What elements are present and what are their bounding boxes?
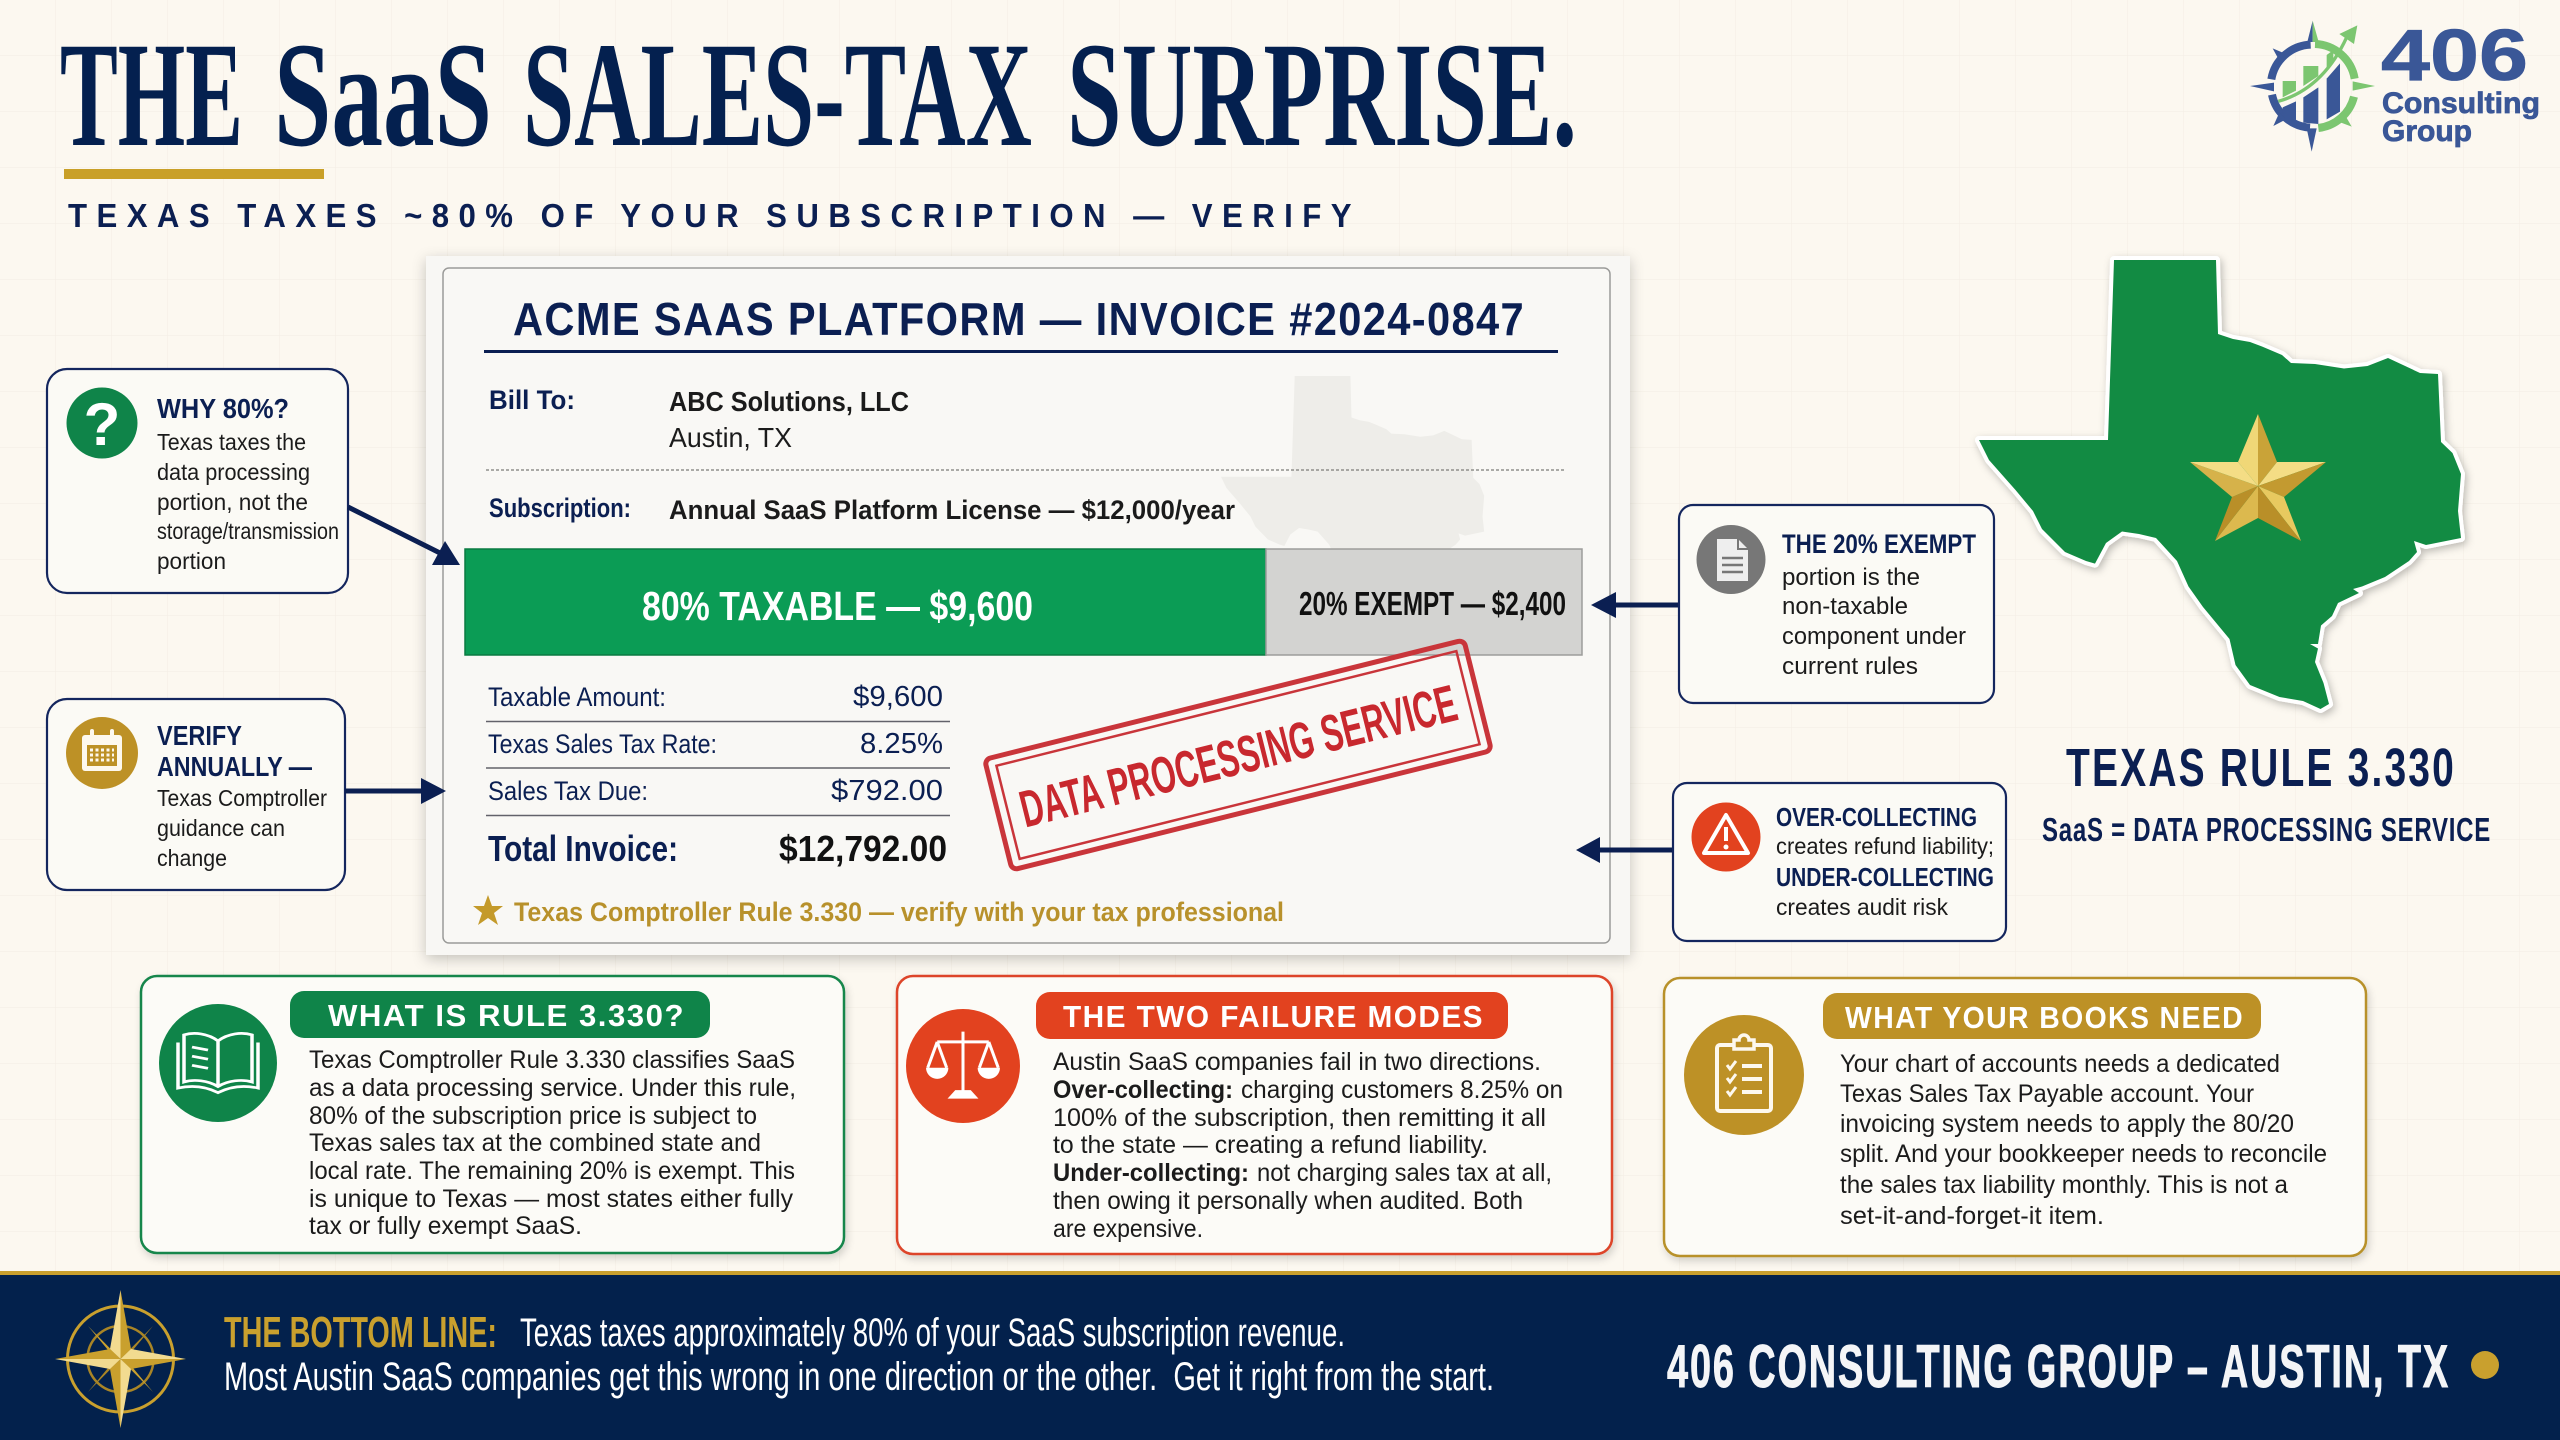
icon: warning triangle (1692, 802, 1760, 872)
split bar: 20 percent exempt: 20% EXEMPT — $2,400 (1299, 585, 1566, 622)
title: SaaS (274, 12, 492, 178)
title: SURPRISE. (1067, 12, 1577, 178)
callout text (1776, 802, 1994, 920)
subscription: Subscription: (489, 493, 631, 523)
calculation table: Sales Tax Due: (488, 776, 648, 806)
callout text: portion (157, 548, 226, 574)
subscription (489, 493, 1235, 525)
body text: split. And your bookkeeper needs to reconcile (1840, 1140, 2327, 1168)
callout text: creates audit risk (1776, 894, 1948, 920)
callout text (1782, 529, 1976, 680)
logo wordmark: 406 (2381, 16, 2528, 96)
logo: 406 Consulting Group: Consulting (2382, 87, 2540, 120)
panel: verify annually callout (47, 699, 345, 890)
body text: local rate. The remaining 20% is exempt. This (309, 1157, 795, 1185)
panel: 20% exempt callout (1679, 505, 1994, 703)
panel: invoice (426, 256, 1630, 955)
body text: not charging sales tax at all, (1257, 1159, 1552, 1187)
callout text: UNDER-COLLECTING (1776, 862, 1994, 892)
calculation table (486, 681, 950, 869)
stamp: data processing service: DATA PROCESSING SERVICE (1014, 675, 1463, 839)
body text: then owing it personally when audited. Both (1053, 1187, 1523, 1215)
arrow: exempt callout to bar (1591, 592, 1679, 618)
bottom line text: THE BOTTOM LINE: (224, 1308, 497, 1357)
stamp: data processing service (985, 640, 1491, 870)
bottom line text (224, 1308, 1494, 1399)
subtitle: TEXAS TAXES ~80% OF YOUR SUBSCRIPTION — VERIFY (68, 197, 1361, 234)
bottom line text: Texas taxes approximately 80% of your SaaS subscription revenue. (520, 1311, 1345, 1355)
callout text (157, 393, 339, 574)
pill heading: WHAT IS RULE 3.330? (328, 998, 685, 1033)
bill to: Bill To: (489, 385, 575, 415)
gold dot (2471, 1351, 2499, 1379)
arrow: verify to table (345, 778, 446, 804)
body text: charging customers 8.25% on (1241, 1076, 1563, 1104)
body text: the sales tax liability monthly. This is not a (1840, 1171, 2288, 1199)
icon: question mark (66, 388, 138, 458)
arrow: collecting callout to total (1576, 837, 1673, 863)
callout text: WHY 80%? (157, 393, 289, 424)
callout text (157, 720, 327, 871)
callout text: THE 20% EXEMPT (1782, 529, 1976, 559)
bill to: ABC Solutions, LLC (669, 386, 909, 417)
callout text: storage/transmission (157, 518, 339, 544)
body text: Over-collecting: (1053, 1076, 1233, 1104)
panel: two failure modes (897, 976, 1612, 1254)
title: SALES-TAX (523, 12, 1032, 178)
body text: Your chart of accounts needs a dedicated (1840, 1050, 2280, 1078)
title (60, 12, 1577, 178)
body text: Under-collecting: (1053, 1159, 1249, 1187)
icon: document (1696, 525, 1766, 594)
callout text: data processing (157, 459, 310, 485)
callout text: non-taxable (1782, 593, 1908, 620)
pill heading: WHAT YOUR BOOKS NEED (1845, 1000, 2244, 1035)
pill heading (1036, 992, 1508, 1039)
callout text: current rules (1782, 653, 1918, 680)
footer band (0, 1271, 2560, 1440)
map: Texas with gold star (1979, 260, 2461, 709)
icon: calendar (66, 717, 138, 789)
bill to: Austin, TX (669, 422, 792, 453)
calculation table: 8.25% (860, 728, 943, 760)
arrow: why 80% to bar (348, 507, 460, 565)
panel: over/under collecting callout (1673, 783, 2006, 941)
icon: scales of justice (906, 1009, 1020, 1123)
callout text: portion, not the (157, 489, 308, 515)
subscription: Annual SaaS Platform License — $12,000/year (669, 495, 1235, 525)
calculation table: Taxable Amount: (488, 682, 666, 712)
callout text: OVER-COLLECTING (1776, 802, 1977, 832)
calculation table: $12,792.00 (779, 828, 947, 869)
body text: invoicing system needs to apply the 80/20 (1840, 1110, 2294, 1138)
title accent bar (64, 169, 324, 179)
split bar: 80 percent taxable: 80% TAXABLE — $9,600 (642, 583, 1033, 629)
logo: 406 Consulting Group (2250, 16, 2540, 152)
body text: Texas Comptroller Rule 3.330 classifies SaaS (309, 1046, 795, 1074)
title: THE (60, 12, 243, 178)
body text: as a data processing service. Under this rule, (309, 1074, 796, 1102)
calculation table: $9,600 (853, 681, 943, 713)
split bar: 80 percent taxable (465, 549, 1266, 655)
body text (1053, 1048, 1563, 1243)
logo: 406 Consulting Group: Group (2382, 115, 2472, 148)
callout text: creates refund liability; (1776, 833, 1994, 859)
pill heading (1823, 993, 2261, 1039)
callout text: change (157, 845, 227, 871)
icon: clipboard checklist (1684, 1015, 1804, 1135)
body text: is unique to Texas — most states either fully (309, 1185, 793, 1213)
icon: open book (159, 1004, 277, 1122)
callout text: Texas Comptroller (157, 785, 327, 811)
callout text: component under (1782, 623, 1966, 650)
body text: to the state — creating a refund liability. (1053, 1131, 1488, 1159)
panel: what your books need (1664, 978, 2366, 1256)
body text: set-it-and-forget-it item. (1840, 1202, 2104, 1230)
calculation table: Texas Sales Tax Rate: (488, 729, 717, 759)
callout text: Texas taxes the (157, 429, 306, 455)
bottom line text: Most Austin SaaS companies get this wrong in one direction or the other. Get it right from the start. (224, 1355, 1494, 1399)
invoice heading: ACME SAAS PLATFORM — INVOICE #2024-0847 (513, 293, 1525, 345)
icon: gold compass rose (55, 1290, 186, 1428)
callout text: VERIFY (157, 720, 242, 751)
calculation table: Total Invoice: (488, 828, 678, 869)
pill heading (290, 991, 710, 1038)
body text: tax or fully exempt SaaS. (309, 1212, 582, 1240)
body text: 80% of the subscription price is subject to (309, 1102, 757, 1130)
icon: question mark: ? (84, 391, 120, 458)
logo compass mark (2250, 21, 2375, 152)
watermark: Texas outline (1221, 376, 1484, 627)
footnote: Texas Comptroller Rule 3.330 — verify with your tax professional (514, 897, 1284, 927)
panel: why 80% callout (47, 369, 348, 593)
split bar: 20 percent exempt (1266, 549, 1582, 655)
callout text: portion is the (1782, 564, 1920, 591)
pill heading: THE TWO FAILURE MODES (1063, 999, 1484, 1034)
body text: Texas sales tax at the combined state and (309, 1129, 761, 1157)
body text: Texas Sales Tax Payable account. Your (1840, 1080, 2254, 1108)
body text: 100% of the subscription, then remitting it all (1053, 1104, 1546, 1132)
body text: are expensive. (1053, 1215, 1203, 1243)
callout text: guidance can (157, 815, 285, 841)
body text: Austin SaaS companies fail in two directions. (1053, 1048, 1541, 1076)
calculation table: $792.00 (831, 775, 943, 807)
panel: what is rule 3.330 (141, 976, 844, 1253)
body text (309, 1046, 796, 1240)
icon: gold star (2190, 414, 2326, 541)
body text (1840, 1050, 2327, 1230)
callout text: ANNUALLY — (157, 751, 312, 782)
bill to (489, 385, 909, 453)
